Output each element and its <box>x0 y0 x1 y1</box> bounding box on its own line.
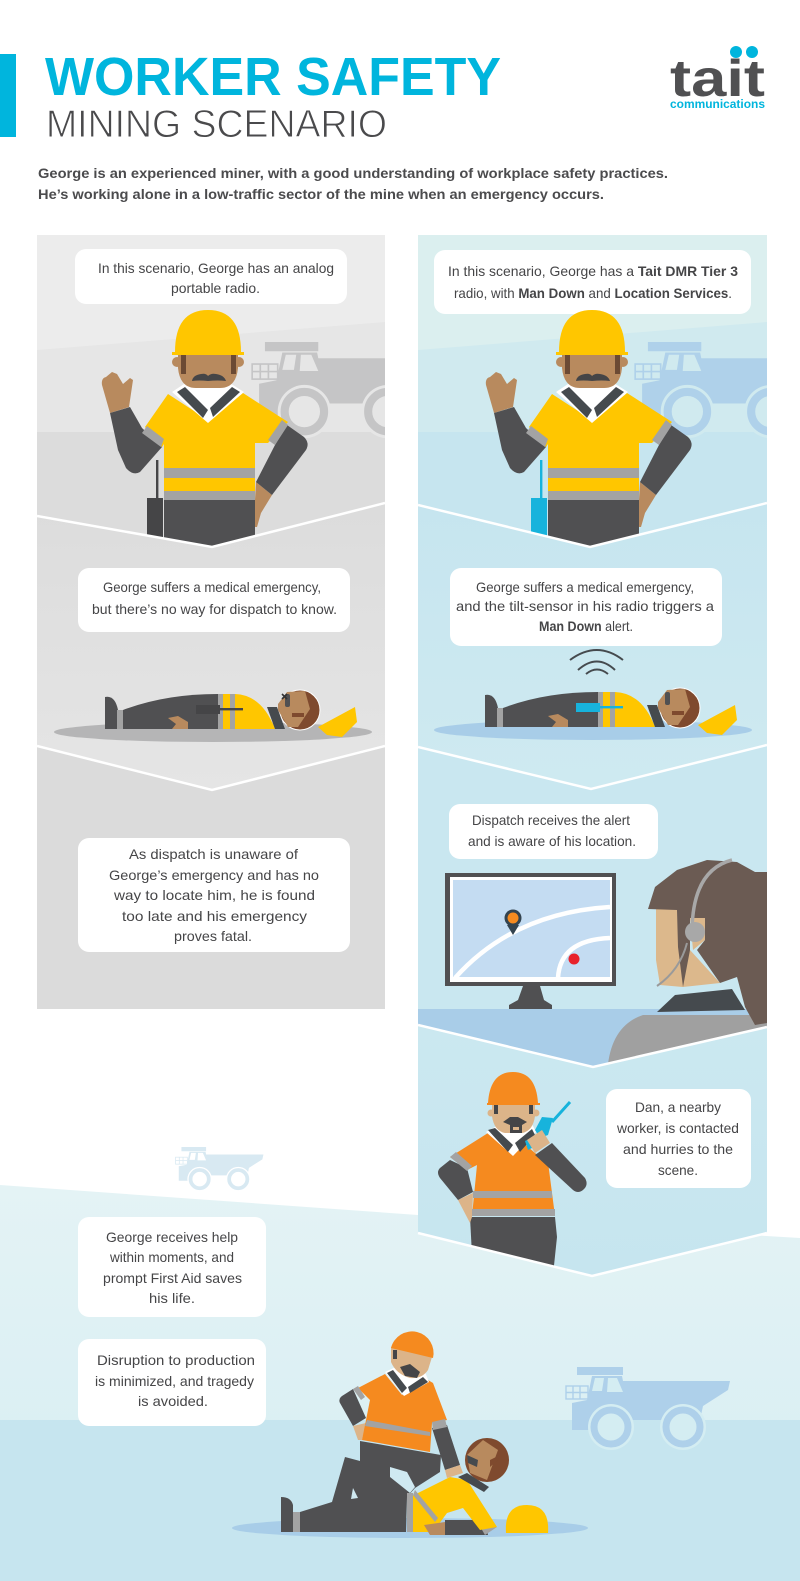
section: dispatch <box>418 800 767 1009</box>
George lying: arm and shirt <box>445 1520 488 1535</box>
text box: first aid: within moments, and <box>109 1249 234 1265</box>
ground shadow <box>232 1518 588 1538</box>
intro text: He’s working alone in a low-traffic sector of the mine when an emergency occurs. <box>38 186 604 202</box>
text box: no way to know: but there’s no way for dispatch to know. <box>92 601 337 617</box>
text box: Dan contacted: worker, is contacted <box>616 1120 739 1136</box>
gaps between legs <box>390 1467 415 1493</box>
text box: Dan contacted: and hurries to the <box>623 1141 733 1157</box>
section: man down alert <box>418 534 767 788</box>
text box: first aid <box>78 1217 266 1317</box>
text box: disruption minimized: is avoided. <box>138 1393 208 1409</box>
text box: analog radio: In this scenario, George has an analog <box>98 260 334 276</box>
panel: analog radio scenario <box>37 235 385 1009</box>
figure: George collapsed, no alert <box>54 690 372 742</box>
panel: Tait DMR scenario <box>418 235 800 1276</box>
text box: Dan contacted: Dan, a nearby <box>635 1099 721 1115</box>
Dan head <box>385 1365 429 1396</box>
text box: first aid: his life. <box>149 1290 195 1306</box>
text box: fatal outcome: As dispatch is unaware of <box>129 846 298 862</box>
text box: disruption minimized: is minimized, and tragedy <box>95 1373 254 1389</box>
text box: no way to know: George suffers a medical emergency, <box>103 579 321 595</box>
intro text <box>38 165 668 202</box>
text box: Dan contacted <box>606 1089 751 1188</box>
text box: tilt sensor alert: Man Down alert. <box>539 618 633 634</box>
logo: tait communications: communications <box>670 97 765 111</box>
text box: Tait radio <box>434 250 751 314</box>
logo: tait communications: tait <box>670 50 765 108</box>
figure: George standing with analog radio <box>102 310 308 560</box>
Dan arms <box>339 1389 366 1426</box>
text box: fatal outcome: way to locate him, he is found <box>113 887 315 903</box>
boot <box>281 1497 293 1532</box>
text box: fatal outcome: proves fatal. <box>174 928 252 944</box>
figure: Dan giving first aid to George <box>232 1331 588 1538</box>
icon: blue mining truck <box>634 342 767 438</box>
text box: disruption minimized: Disruption to production <box>97 1352 255 1368</box>
text box: first aid: prompt First Aid saves <box>103 1270 242 1286</box>
text box: first aid: George receives help <box>106 1229 238 1245</box>
text box: tilt sensor alert: and the tilt-sensor in his radio triggers a <box>456 598 714 614</box>
text box: dispatch aware: and is aware of his location. <box>468 833 636 849</box>
text box: no way to know <box>78 568 350 632</box>
figure: Dan with radio <box>438 1072 587 1275</box>
accent bar <box>0 54 16 137</box>
icon: large blue mining truck <box>566 1367 730 1450</box>
text box: Dan contacted: scene. <box>658 1162 698 1178</box>
text box: dispatch aware <box>449 804 658 859</box>
title <box>45 47 501 146</box>
figure: George collapsed with radio alert <box>434 688 752 740</box>
text box: fatal outcome: too late and his emergency <box>122 908 307 924</box>
icon: small distant truck <box>176 1147 263 1191</box>
fallen helmet <box>506 1505 548 1533</box>
text box: dispatch aware: Dispatch receives the alert <box>472 812 630 828</box>
Dan shirt <box>358 1374 447 1452</box>
text box: tilt sensor alert: George suffers a medical emergency, <box>476 579 694 595</box>
desk <box>418 1009 750 1066</box>
text box: disruption minimized <box>78 1339 266 1426</box>
George head <box>465 1438 509 1482</box>
text box: analog radio: portable radio. <box>171 280 260 296</box>
text box: analog radio <box>75 249 347 304</box>
intro text: George is an experienced miner, with a good understanding of workplace safety practices. <box>38 165 668 181</box>
panel bottom chevron edge <box>418 1233 767 1276</box>
icon: dispatch monitor with map <box>445 873 616 1009</box>
text box: Tait radio: In this scenario, George has a Tait DMR Tier 3 <box>448 263 738 279</box>
icon: wireless signal arcs <box>570 650 623 674</box>
title: WORKER SAFETY <box>45 47 501 107</box>
section: medical emergency <box>37 536 385 756</box>
figure: dispatcher with headset <box>600 860 767 1068</box>
figure: George standing with Tait radio <box>486 310 692 560</box>
hill background <box>0 1147 800 1581</box>
section: nearby worker <box>418 1025 767 1276</box>
section: fatal outcome <box>37 746 385 1010</box>
kneeling legs <box>300 1441 441 1532</box>
text box: Tait radio: radio, with Man Down and Location Services. <box>454 285 732 301</box>
title: MINING SCENARIO <box>46 103 387 146</box>
text box: fatal outcome <box>78 838 350 952</box>
text box: tilt sensor alert <box>450 568 722 646</box>
text box: fatal outcome: George’s emergency and has no <box>109 867 319 883</box>
icon: grey mining truck <box>251 342 385 438</box>
